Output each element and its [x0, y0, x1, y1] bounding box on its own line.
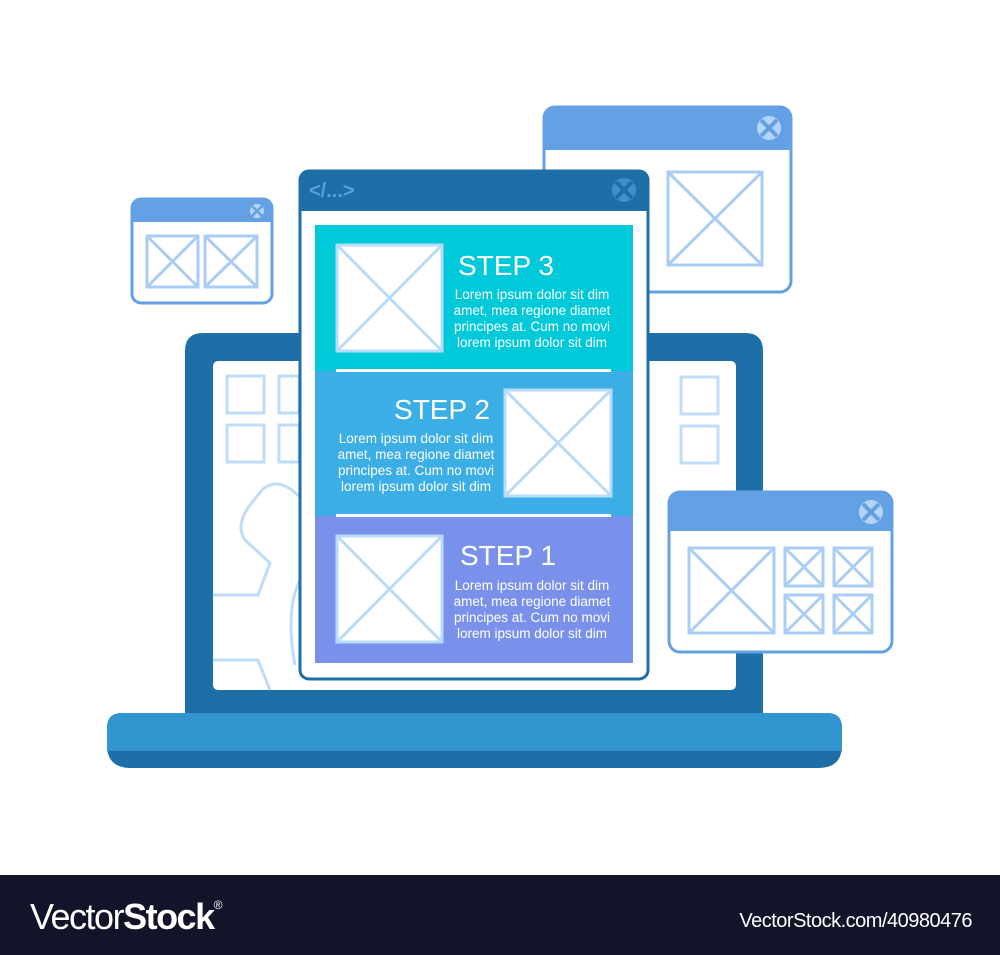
panel: step 3 [315, 225, 633, 371]
panel: step 3: STEP 3 [458, 250, 554, 281]
laptop screen [185, 333, 763, 715]
code tag: </...> [309, 180, 355, 202]
panel: step 1: STEP 1 [460, 540, 556, 571]
panel: step 2 [315, 371, 633, 516]
icon: close [757, 116, 781, 140]
panel: step 2: lorem ipsum dolor sit dim [341, 479, 491, 494]
footer [0, 875, 1000, 955]
icon: close [250, 204, 264, 218]
panel: step 1: lorem ipsum dolor sit dim [457, 626, 607, 641]
laptop base [107, 713, 842, 768]
footer logo: VectorStock [30, 896, 214, 937]
panel: step 1 [315, 516, 633, 663]
panel: step 3: amet, mea regione diamet [454, 303, 611, 318]
panel: step 2: Lorem ipsum dolor sit dim [339, 431, 493, 446]
panel: step 2: amet, mea regione diamet [338, 447, 495, 462]
panel: step 3: lorem ipsum dolor sit dim [457, 335, 607, 350]
icon: close [612, 178, 636, 202]
window: top-right [544, 107, 791, 292]
panel: step 1: Lorem ipsum dolor sit dim [455, 578, 609, 593]
icon: close [859, 500, 883, 524]
footer id: VectorStock.com/40980476 [739, 910, 972, 932]
panel: step 2: principes at. Cum no movi [338, 463, 494, 478]
panel: step 2: STEP 2 [394, 394, 490, 425]
window: right [669, 492, 892, 652]
panel: step 3: principes at. Cum no movi [454, 319, 610, 334]
laptop [107, 333, 842, 768]
panel: step 1: amet, mea regione diamet [454, 594, 611, 609]
panel: step 3: Lorem ipsum dolor sit dim [455, 287, 609, 302]
main window: steps [300, 171, 648, 679]
window: top-left small [132, 199, 272, 303]
panel: step 1: principes at. Cum no movi [454, 610, 610, 625]
footer logo: ® [214, 898, 223, 912]
